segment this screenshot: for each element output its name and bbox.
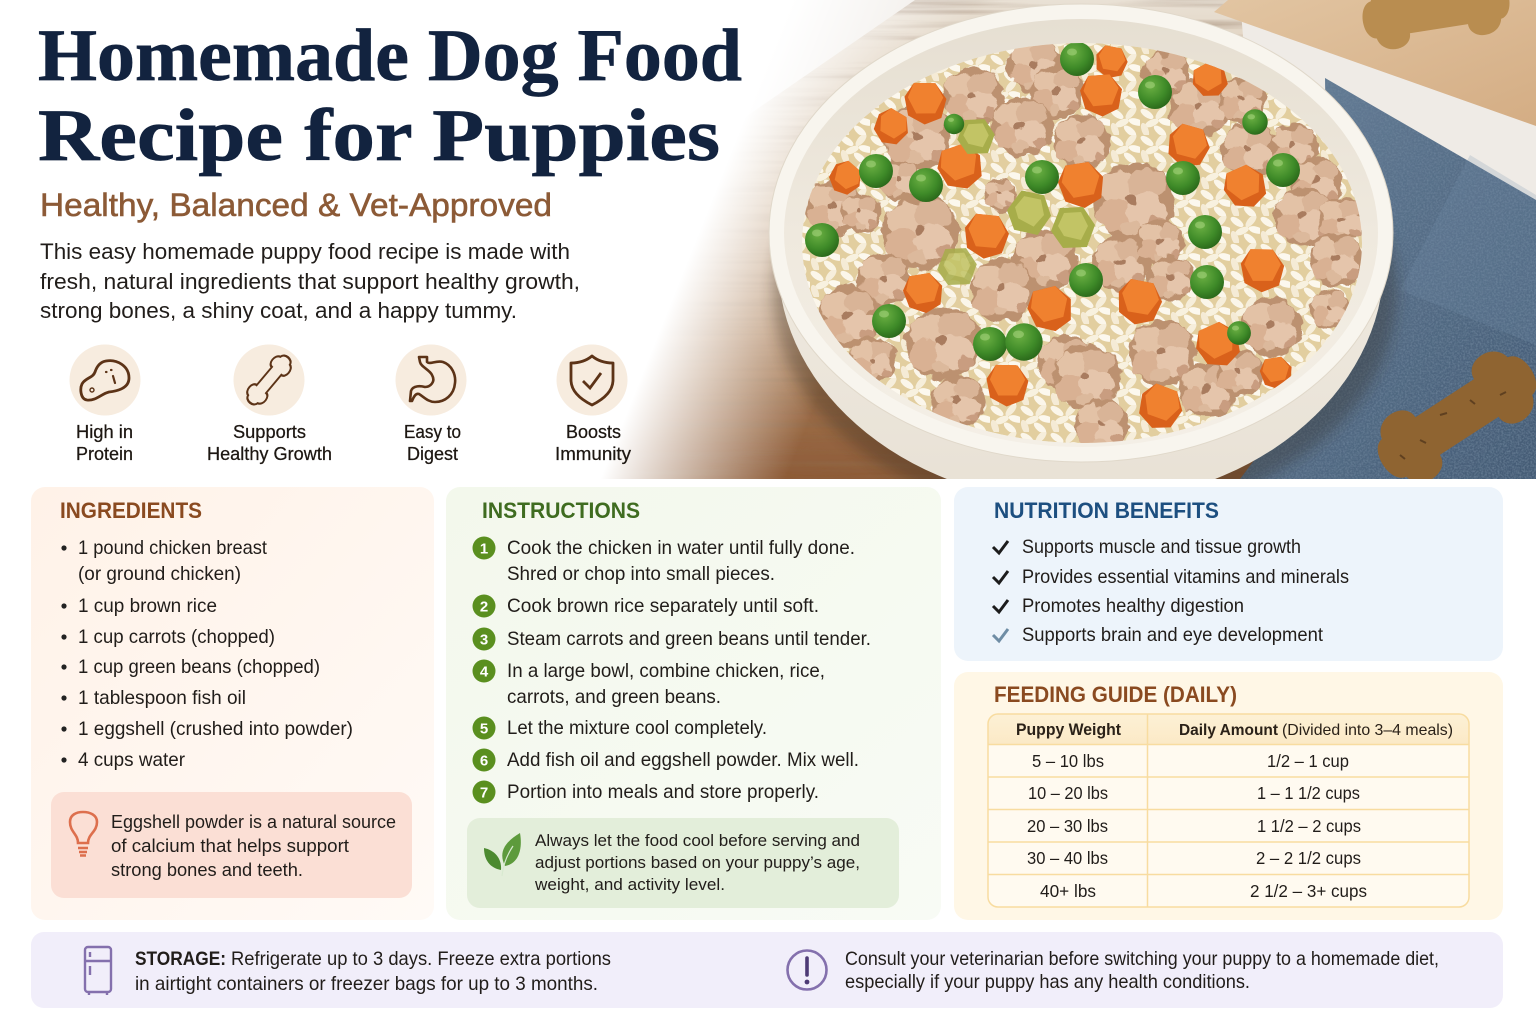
nutrition check list xyxy=(993,536,1349,646)
ingredients list: 1 tablespoon fish oil xyxy=(78,687,246,709)
white fade toward text column xyxy=(560,0,956,479)
table rows: 40+ lbs xyxy=(1040,881,1096,901)
table rows: 30 – 40 lbs xyxy=(1027,848,1108,868)
benefit: supports healthy growth xyxy=(207,344,332,464)
peas xyxy=(805,42,1300,361)
eggshell callout xyxy=(51,792,412,898)
benefit: supports healthy growth: Healthy Growth xyxy=(207,444,332,464)
panel: ingredients xyxy=(31,487,434,920)
benefit: high in protein xyxy=(70,344,140,464)
nutrition check list: Promotes healthy digestion xyxy=(1022,595,1244,617)
ingredients list: 1 cup green beans (chopped) xyxy=(78,656,320,678)
blue cloth xyxy=(1240,78,1536,479)
numbered steps: 6 xyxy=(480,752,488,770)
benefit icons row xyxy=(70,344,631,464)
title: Recipe for Puppies xyxy=(38,95,720,177)
instructions heading: INSTRUCTIONS xyxy=(482,498,640,523)
nutrition check list: Provides essential vitamins and minerals xyxy=(1022,566,1349,588)
table header: (Divided into 3–4 meals) xyxy=(1282,722,1453,739)
numbered steps: In a large bowl, combine chicken, rice, xyxy=(507,660,825,682)
panel: feeding guide xyxy=(954,672,1503,920)
yellow-green vegetable pieces xyxy=(937,119,1095,285)
numbered steps xyxy=(472,536,871,804)
nutrition check list: Supports muscle and tissue growth xyxy=(1022,536,1301,558)
title xyxy=(38,15,742,177)
table rows: 1 1/2 – 2 cups xyxy=(1257,816,1361,836)
header text xyxy=(38,15,742,323)
numbered steps: Let the mixture cool completely. xyxy=(507,717,767,739)
benefit: boosts immunity xyxy=(555,344,631,464)
ingredients heading: INGREDIENTS xyxy=(60,498,202,523)
nutrition background xyxy=(954,487,1503,661)
bowl interior xyxy=(784,19,1378,447)
footer background xyxy=(31,932,1503,1008)
bowl shadow xyxy=(766,238,1403,479)
veterinarian note xyxy=(845,948,1439,993)
veterinarian note: Consult your veterinarian before switching your puppy to a homemade diet, xyxy=(845,948,1439,970)
numbered steps: Add fish oil and eggshell powder. Mix well. xyxy=(507,749,859,771)
benefit: boosts immunity: Boosts xyxy=(566,422,621,442)
icon: warning xyxy=(788,950,826,990)
cloth fold xyxy=(1400,155,1536,345)
bone biscuit on cloth xyxy=(1378,352,1536,479)
numbered steps: 3 xyxy=(480,632,488,648)
benefit: high in protein: High in xyxy=(76,422,133,442)
numbered steps: Steam carrots and green beans until tender. xyxy=(507,628,871,650)
benefit: easy to digest xyxy=(396,344,466,464)
table rows xyxy=(1027,751,1367,901)
ingredients background xyxy=(31,487,434,920)
eggshell callout: strong bones and teeth. xyxy=(111,859,303,880)
numbered steps: 1 xyxy=(480,540,488,558)
numbered steps: Cook the chicken in water until fully done. xyxy=(507,537,855,559)
numbered steps: Portion into meals and store properly. xyxy=(507,781,819,803)
storage text xyxy=(135,948,611,995)
wooden board xyxy=(610,0,1254,479)
veterinarian note: especially if your puppy has any health conditions. xyxy=(845,971,1250,993)
storage text: in airtight containers or freezer bags for up to 3 months. xyxy=(135,973,598,995)
table rows: 5 – 10 lbs xyxy=(1032,751,1104,771)
table header: Daily Amount xyxy=(1179,722,1279,739)
benefit: easy to digest: Digest xyxy=(407,444,458,464)
numbered steps: Shred or chop into small pieces. xyxy=(507,563,775,585)
table rows: 1 – 1 1/2 cups xyxy=(1257,783,1360,803)
table rows: 2 – 2 1/2 cups xyxy=(1256,848,1361,868)
ingredients list: 1 eggshell (crushed into powder) xyxy=(78,718,353,740)
intro paragraph: This easy homemade puppy food recipe is made with xyxy=(40,239,570,264)
instructions background xyxy=(446,487,941,920)
cooling tip callout: adjust portions based on your puppy’s age, xyxy=(535,853,860,872)
ingredients list: (or ground chicken) xyxy=(78,563,241,585)
numbered steps: carrots, and green beans. xyxy=(507,686,721,708)
cooling tip callout: weight, and activity level. xyxy=(534,875,725,894)
rice bed xyxy=(802,43,1362,443)
bowl body xyxy=(781,298,1381,479)
table header xyxy=(1016,720,1453,739)
ingredients list: 1 pound chicken breast xyxy=(78,537,268,559)
chicken pieces xyxy=(805,40,1366,451)
ingredients list: 4 cups water xyxy=(78,749,185,771)
panel: instructions xyxy=(446,487,941,920)
numbered steps: 5 xyxy=(480,720,488,738)
table rows: 20 – 30 lbs xyxy=(1027,816,1108,836)
table header: Puppy Weight xyxy=(1016,720,1121,739)
ingredients list: 1 cup brown rice xyxy=(78,595,217,617)
numbered steps: 2 xyxy=(480,598,488,616)
table rows: 10 – 20 lbs xyxy=(1028,783,1108,803)
numbered steps: 4 xyxy=(480,664,489,680)
table rows: 1/2 – 1 cup xyxy=(1267,751,1349,771)
carrots xyxy=(822,41,1292,437)
food mound xyxy=(802,40,1366,451)
panel: storage and vet note xyxy=(31,932,1503,1008)
cooling tip callout: Always let the food cool before serving and xyxy=(535,831,860,850)
ingredients list: 1 cup carrots (chopped) xyxy=(78,626,275,648)
eggshell callout: Eggshell powder is a natural source xyxy=(111,811,396,832)
intro paragraph: strong bones, a shiny coat, and a happy tummy. xyxy=(40,298,517,323)
cooling tip callout xyxy=(467,818,899,908)
bowl rim xyxy=(769,4,1393,462)
title: Homemade Dog Food xyxy=(38,15,742,97)
storage text: Refrigerate up to 3 days. Freeze extra portions xyxy=(231,948,611,970)
panel: nutrition benefits xyxy=(954,487,1503,661)
marble tabletop xyxy=(830,0,1536,200)
feeding heading: FEEDING GUIDE (DAILY) xyxy=(994,682,1237,707)
icon: fridge xyxy=(85,947,111,995)
intro paragraph: fresh, natural ingredients that support healthy growth, xyxy=(40,269,580,294)
numbered steps: 7 xyxy=(480,784,488,802)
feeding background xyxy=(954,672,1503,920)
ingredients list xyxy=(61,537,353,771)
cutting board xyxy=(1214,0,1536,126)
nutrition check list: Supports brain and eye development xyxy=(1022,624,1324,646)
bone biscuit on cutting board xyxy=(1362,0,1510,50)
benefit: high in protein: Protein xyxy=(76,444,133,464)
intro paragraph xyxy=(40,239,580,323)
hero photo: bowl of puppy food on wood with blue cloth xyxy=(608,0,1536,479)
subtitle: Healthy, Balanced & Vet-Approved xyxy=(40,187,552,223)
numbered steps: Cook brown rice separately until soft. xyxy=(507,595,819,617)
benefit: easy to digest: Easy to xyxy=(404,422,461,442)
benefit: supports healthy growth: Supports xyxy=(233,422,306,442)
benefit: boosts immunity: Immunity xyxy=(555,444,631,464)
storage text: STORAGE: xyxy=(135,948,226,970)
table rows: 2 1/2 – 3+ cups xyxy=(1250,881,1367,901)
nutrition heading: NUTRITION BENEFITS xyxy=(994,498,1219,523)
feeding table xyxy=(988,714,1469,907)
eggshell callout: of calcium that helps support xyxy=(111,835,349,856)
